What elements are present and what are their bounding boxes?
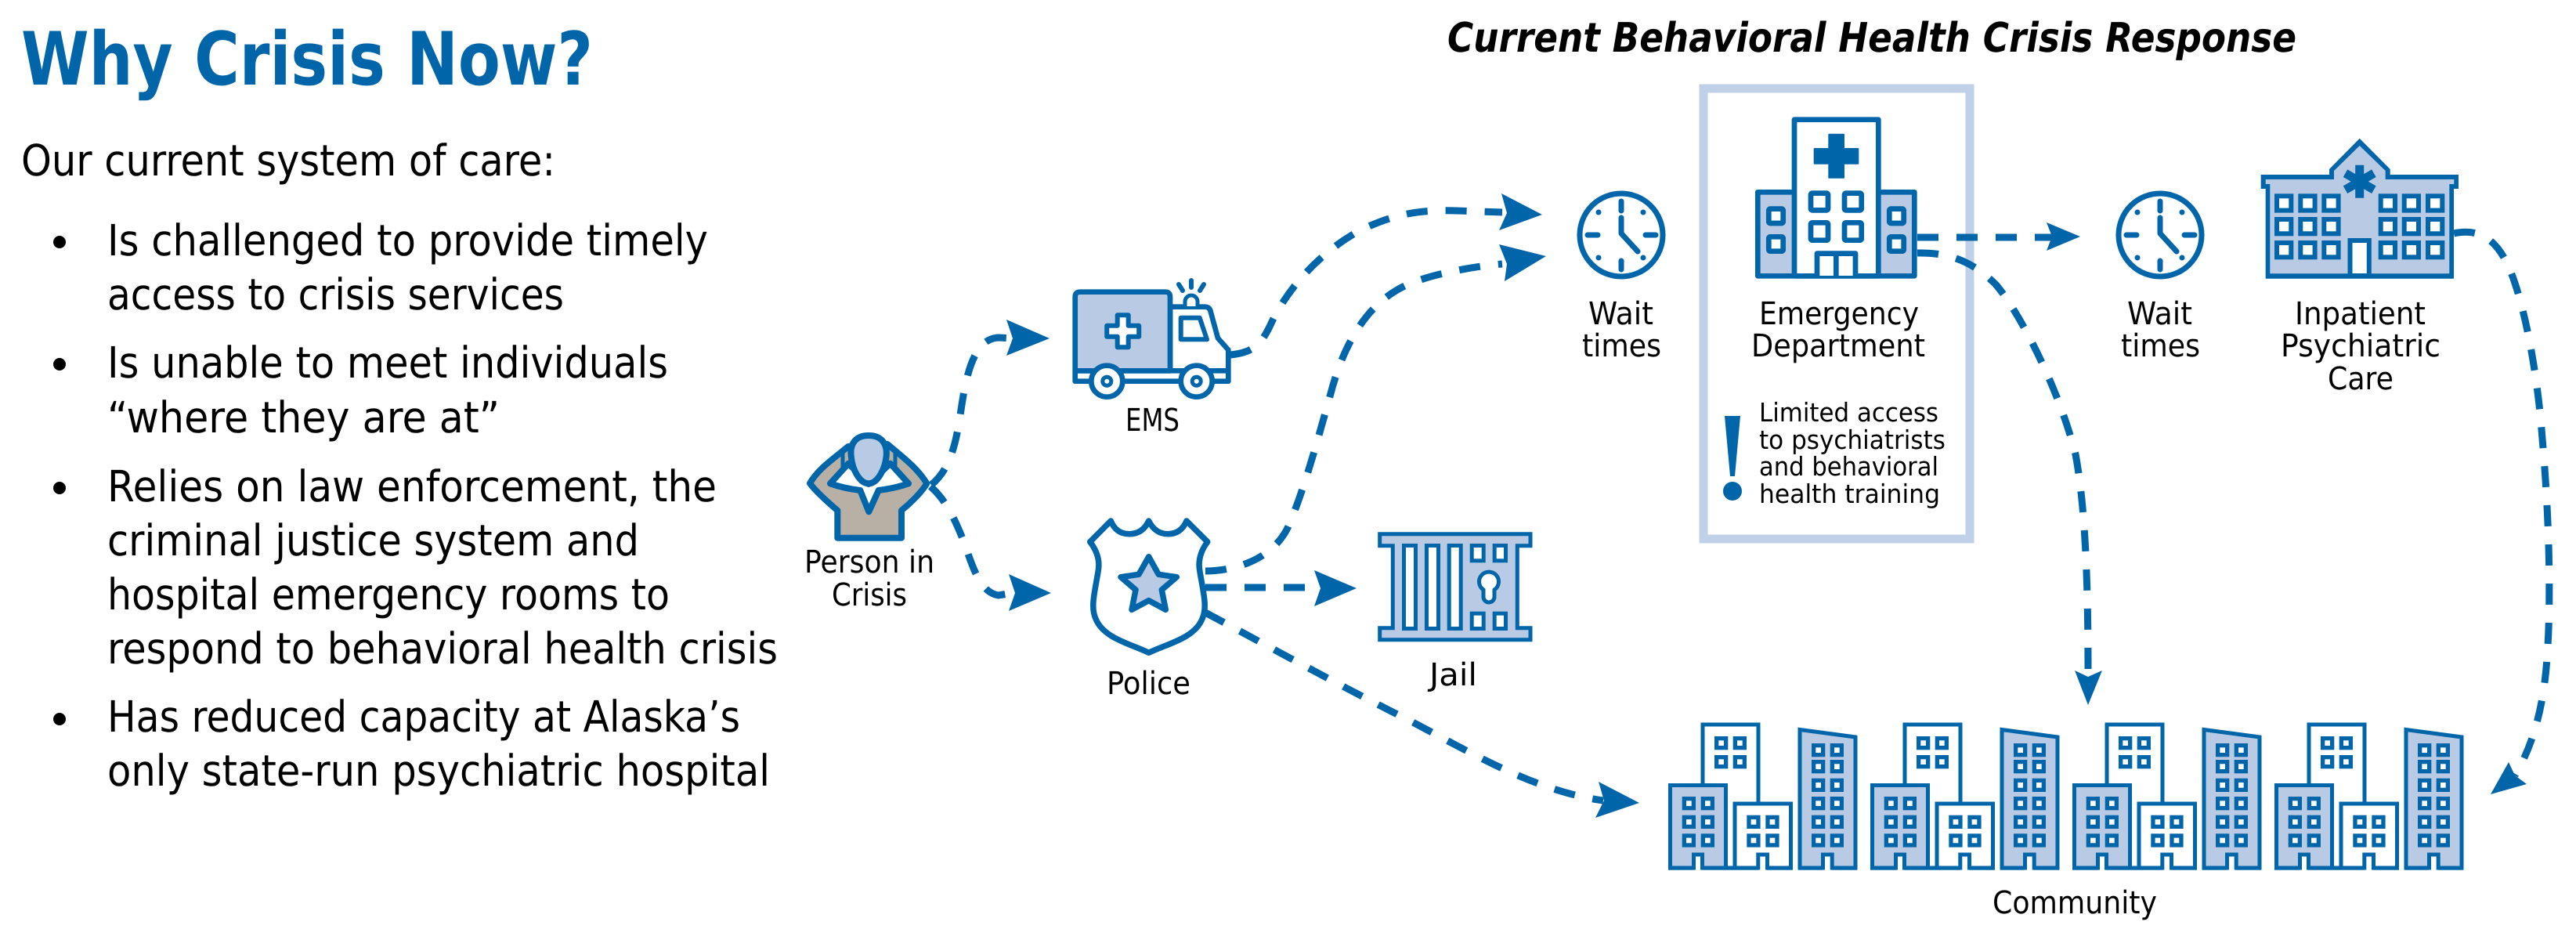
label: inpatient psychiatric care: Inpatient (2295, 296, 2426, 332)
icon: community buildings (1668, 725, 2463, 870)
intro text: Our current system of care: (21, 136, 555, 186)
label: inpatient psychiatric care (2281, 296, 2441, 397)
label: wait times 1: Wait (1588, 296, 1653, 332)
bullet 1: Is challenged to provide timely (107, 215, 708, 266)
label: emergency department: Emergency (1759, 296, 1919, 332)
arrow: police to wait times (1205, 244, 1546, 571)
label: wait times 2 (2121, 296, 2200, 364)
title: Why Crisis Now? (21, 17, 593, 103)
arrow: person to EMS (931, 320, 1050, 485)
label: emergency department: Department (1751, 328, 1925, 364)
label: wait times 2: times (2121, 328, 2200, 364)
arrow: person to police (930, 486, 1051, 611)
icon: emergency department hospital (1758, 120, 1914, 276)
label: inpatient psychiatric care: Care (2328, 361, 2394, 397)
callout: limited access: to psychiatrists (1759, 425, 1946, 455)
bullet 3: hospital emergency rooms to (107, 569, 670, 620)
arrow: inpatient to community (2454, 232, 2549, 794)
label: person in crisis: Person in (804, 544, 934, 580)
callout: limited access: health training (1759, 479, 1940, 509)
callout: limited access: and behavioral (1759, 451, 1938, 482)
icon: wait time clock 2 (2119, 193, 2202, 277)
bullet list (53, 215, 778, 796)
icon: police badge (1090, 521, 1208, 652)
bullet 4: Has reduced capacity at Alaska’s (107, 692, 740, 742)
bullet 2: Is unable to meet individuals (107, 338, 668, 388)
panel: emergency department highlight box (1703, 89, 1970, 539)
bullet 2: “where they are at” (107, 392, 500, 443)
icon: wait time clock 1 (1580, 193, 1663, 277)
bullet 3: Relies on law enforcement, the (107, 461, 717, 511)
label: EMS: EMS (1125, 403, 1180, 439)
arrow: police to jail (1205, 570, 1357, 606)
icon: exclamation mark (1723, 416, 1742, 501)
bullet 3: criminal justice system and (107, 515, 639, 566)
bullet 2 (53, 338, 668, 443)
icon: jail (1380, 534, 1530, 640)
bullet 4: only state-run psychiatric hospital (107, 746, 770, 796)
bullet 4 (53, 692, 770, 796)
label: wait times 1 (1582, 296, 1661, 364)
bullet 3: respond to behavioral health crisis (107, 624, 778, 674)
arrow: emergency department to wait times (1917, 222, 2080, 251)
arrow: police to community (1205, 613, 1639, 818)
label: wait times 2: Wait (2127, 296, 2192, 332)
label: inpatient psychiatric care: Psychiatric (2281, 328, 2441, 364)
bullet 1: access to crisis services (107, 269, 564, 320)
label: person in crisis (804, 544, 934, 613)
label: person in crisis: Crisis (832, 577, 907, 613)
label: wait times 1: times (1582, 328, 1661, 364)
bullet 3 (53, 461, 778, 674)
label: community: Community (1993, 885, 2157, 921)
callout: limited access: Limited access (1759, 397, 1938, 428)
bullet 1 (53, 215, 708, 320)
icon: ambulance (1075, 280, 1228, 397)
label: police: Police (1107, 666, 1190, 702)
callout: limited access (1759, 397, 1946, 509)
icon: person in crisis (810, 436, 927, 538)
arrow: emergency department to community (1917, 253, 2102, 705)
diagram heading: Current Behavioral Health Crisis Response (1447, 15, 2296, 62)
icon: inpatient psychiatric hospital (2261, 139, 2459, 279)
label: jail: Jail (1427, 657, 1477, 693)
arrow: EMS to wait times (1230, 193, 1542, 355)
label: emergency department (1751, 296, 1925, 364)
